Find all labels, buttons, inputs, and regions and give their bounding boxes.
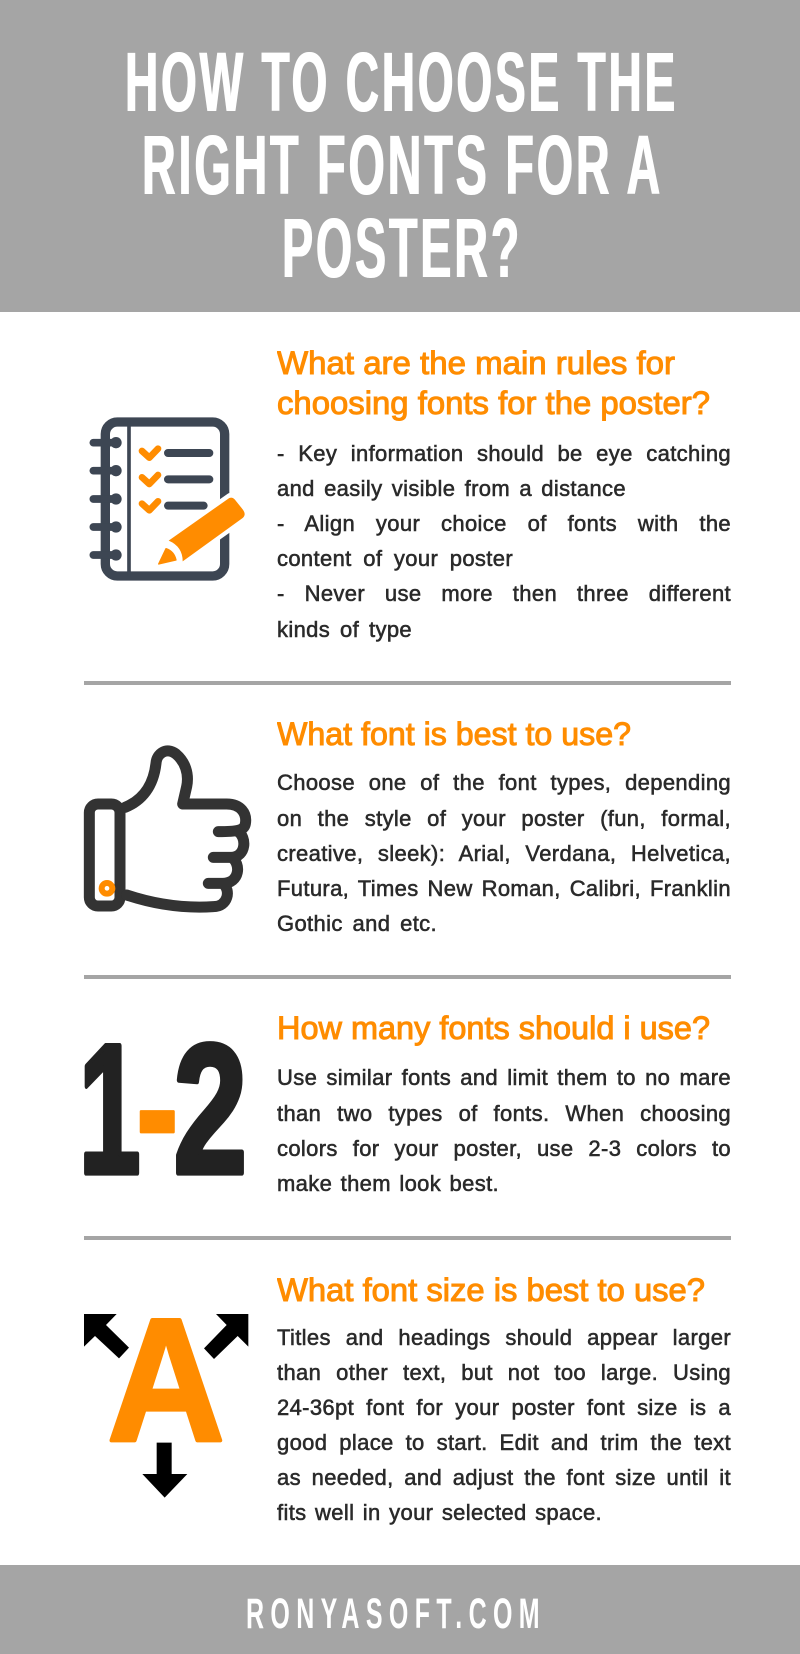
text block: best font: Choose one of the font types, depending [277,770,731,795]
heading: main rules: choosing fonts for the poster? [277,385,710,421]
text block: how many fonts: than two types of fonts. When choosing [277,1101,731,1126]
icon: thumbs up [84,745,252,913]
text block: best font: Futura, Times New Roman, Calibri, Franklin [277,876,731,901]
heading: font size: What font size is best to use? [277,1272,705,1308]
text block: how many fonts: make them look best. [277,1171,499,1196]
title: POSTER? [282,201,522,295]
text block: font size: fits well in your selected space. [277,1500,602,1525]
text block: main rules: - Never use more then three different [277,581,731,606]
text block: font size: good place to start. Edit and trim the text [277,1430,731,1455]
text block: main rules [277,441,731,642]
text block: best font: Gothic and etc. [277,911,437,936]
text block: best font: on the style of your poster (fun, formal, [277,806,731,831]
heading: how many fonts: How many fonts should i use? [277,1010,710,1046]
heading: main rules: What are the main rules for [277,345,675,381]
text block: main rules: and easily visible from a distance [277,476,626,501]
text block: best font [277,770,731,936]
text block: how many fonts [277,1065,731,1196]
panel: font size [84,1272,731,1525]
heading: best font: What font is best to use? [277,716,631,752]
text block: main rules: - Align your choice of fonts with the [277,511,731,536]
footer banner [0,1565,800,1654]
text block: main rules: kinds of type [277,617,412,642]
text block: how many fonts: colors for your poster, use 2-3 colors to [277,1136,731,1161]
text block: font size [277,1325,731,1525]
text block: font size: Titles and headings should appear larger [277,1325,731,1350]
footer website text: RONYASOFT.COM [246,1590,546,1638]
title [125,35,678,295]
header banner [0,0,800,312]
icon: notebook with checklist and pencil [90,417,245,581]
text block: font size: than other text, but not too large. Using [277,1360,731,1385]
panel: main rules [90,345,731,642]
panel: how many fonts [79,1010,731,1196]
heading: main rules [277,345,710,421]
text block: main rules: content of your poster [277,546,513,571]
icon: letter A with arrows [84,1300,248,1498]
text block: best font: creative, sleek): Arial, Verdana, Helvetica, [277,841,731,866]
text block: font size: as needed, and adjust the font size until it [277,1465,731,1490]
text block: main rules: - Key information should be eye catching [277,441,731,466]
text block: how many fonts: Use similar fonts and limit them to no mare [277,1065,731,1090]
panel: best font [84,716,731,936]
icon: 1-2 numerals [79,1030,247,1190]
text block: font size: 24-36pt font for your poster font size is a [277,1395,731,1420]
